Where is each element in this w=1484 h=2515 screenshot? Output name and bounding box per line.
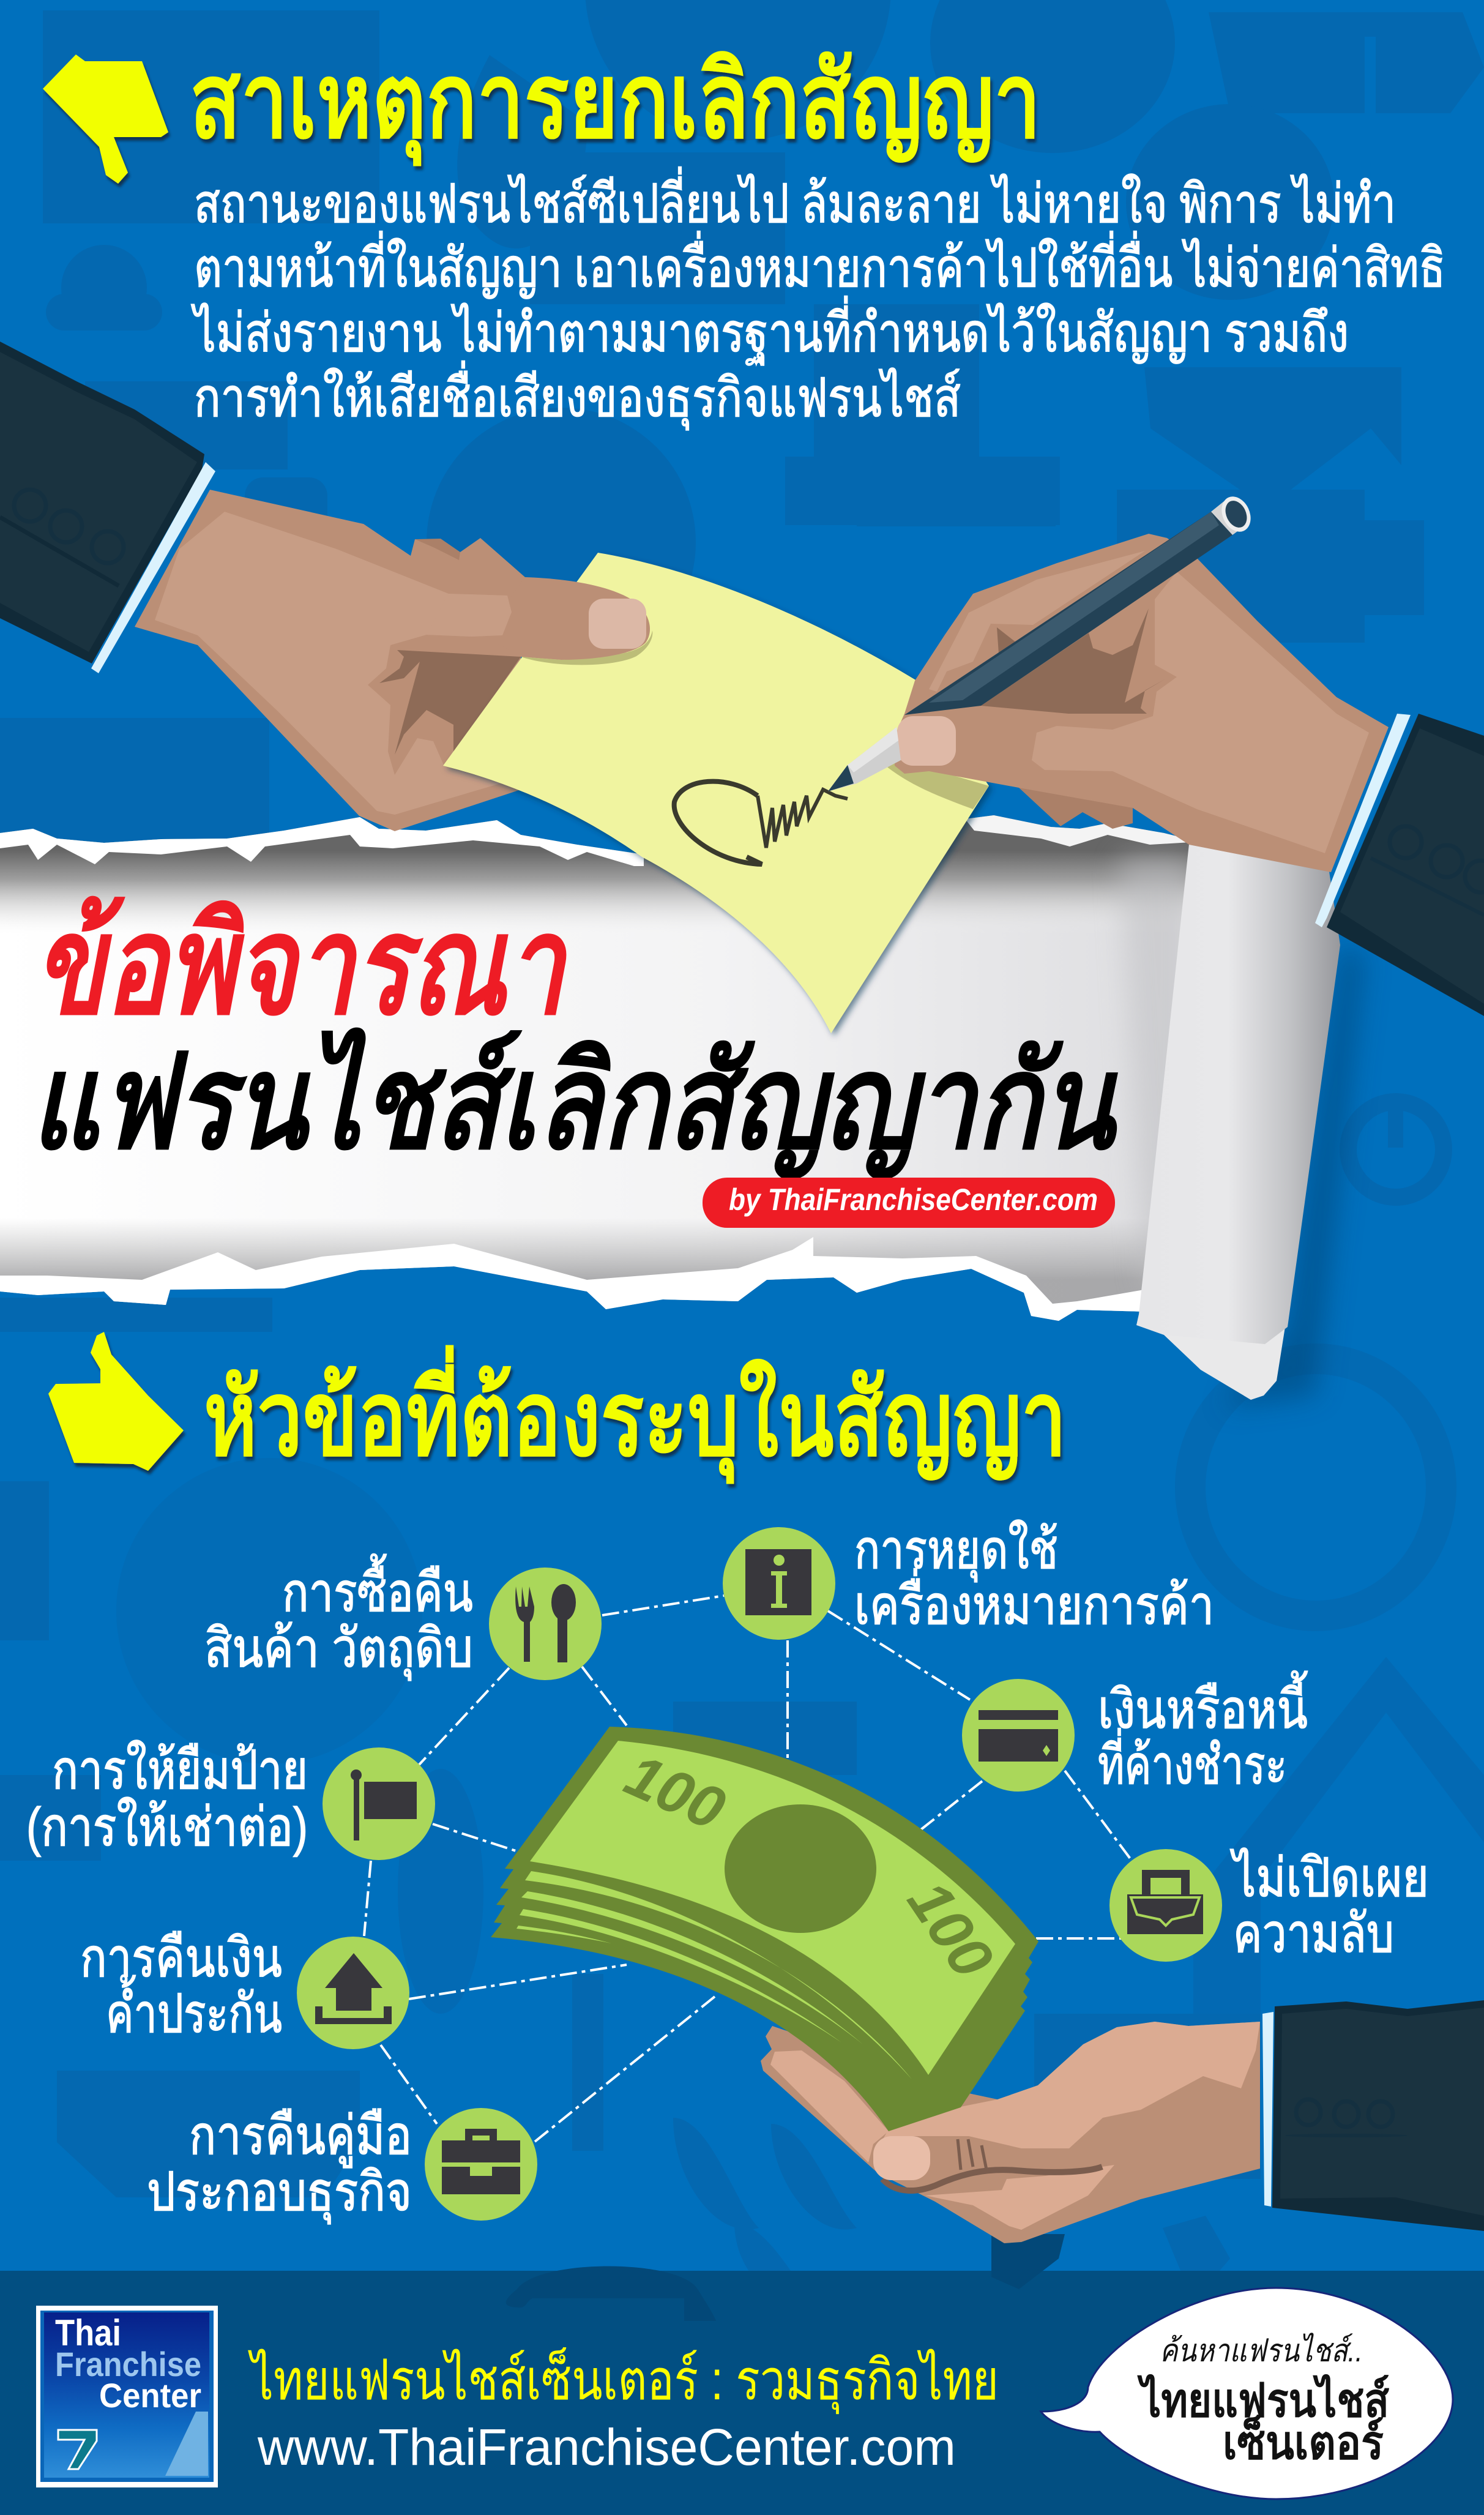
network lines xyxy=(364,1596,1131,2142)
logo xyxy=(36,2306,218,2487)
label: manual: ประกอบธุรกิจ xyxy=(147,2161,412,2224)
node: toolbox xyxy=(425,2108,537,2221)
left hand xyxy=(135,490,651,831)
label: secrets: ไม่เปิดเผย xyxy=(1230,1847,1429,1908)
heading: causes: สาเหตุการยกเลิกสัญญา xyxy=(190,42,1041,166)
torn top edge left xyxy=(0,817,644,866)
label: deposit xyxy=(80,1927,282,2044)
torn top edge right xyxy=(965,815,1191,846)
icon: info xyxy=(745,1549,811,1615)
icon: upload xyxy=(315,1953,392,2024)
label: food and materials xyxy=(204,1554,473,1681)
label: deposit: การคืนเงิน xyxy=(80,1927,282,1988)
icon: card xyxy=(979,1710,1058,1762)
paper sheet xyxy=(0,808,1199,1328)
right hand xyxy=(895,534,1389,872)
label: food and materials: สินค้า วัตถุดิบ xyxy=(204,1618,473,1681)
lower sleeve xyxy=(1262,2000,1484,2231)
label: debts: ที่ค้างชำระ xyxy=(1098,1728,1287,1795)
pen xyxy=(828,492,1256,791)
speech bubble xyxy=(1041,2288,1453,2499)
logo: Franchise xyxy=(55,2345,201,2383)
banknote stack: 100 xyxy=(895,1869,1007,1989)
torn bottom edge xyxy=(0,1237,1148,1321)
label: trademark: การหยุดใช้ xyxy=(854,1519,1058,1582)
heading: contract topics: หัวข้อที่ต้องระบุในสัญญา xyxy=(204,1345,1067,1484)
thumb nail xyxy=(897,716,956,766)
left thumb xyxy=(427,577,652,665)
byline pill: by ThaiFranchiseCenter.com xyxy=(729,1183,1098,1217)
label: debts: เงินหรือหนี้ xyxy=(1098,1671,1308,1740)
body text: causes xyxy=(191,166,1445,430)
left sleeve xyxy=(0,342,215,673)
node: upload xyxy=(297,1937,409,2049)
icon: toolbox xyxy=(442,2129,520,2194)
label: trademark xyxy=(854,1519,1214,1635)
buttons xyxy=(1390,826,1484,892)
lower hand xyxy=(761,2022,1260,2243)
paper roll xyxy=(1164,1327,1285,1400)
note stripes xyxy=(525,1871,912,2079)
label: signage: การให้ยืมป้าย xyxy=(52,1740,308,1800)
footer band xyxy=(0,2234,1484,2515)
label: trademark: เครื่องหมายการค้า xyxy=(854,1568,1214,1635)
label: secrets: ความลับ xyxy=(1233,1903,1394,1964)
label: debts xyxy=(1098,1671,1308,1795)
footer url: www.ThaiFranchiseCenter.com xyxy=(257,2418,956,2476)
main title: แฟรนไชส์เลิกสัญญากัน xyxy=(31,1027,1119,1180)
logo arrow xyxy=(58,2430,97,2469)
main title: ข้อพิจารณา xyxy=(34,888,569,1042)
speech bubble: ค้นหาแฟรนไชส์.. xyxy=(1160,2333,1363,2369)
node: card xyxy=(962,1679,1075,1792)
icon: thumbs down xyxy=(43,54,168,184)
label: manual: การคืนคู่มือ xyxy=(189,2105,412,2168)
node: flag xyxy=(323,1747,435,1860)
right sleeve xyxy=(1315,714,1484,1016)
label: secrets xyxy=(1230,1847,1429,1964)
label: food and materials: การซื้อคืน xyxy=(282,1554,473,1623)
logo: Center xyxy=(99,2376,201,2415)
contract paper with signature xyxy=(443,553,989,1033)
buttons xyxy=(14,490,124,563)
logo: Thai xyxy=(55,2312,121,2353)
icon: fork and spoon xyxy=(515,1584,576,1662)
denomination: 100 xyxy=(616,1741,735,1843)
icon: thumbs up xyxy=(48,1332,184,1471)
roll shadow xyxy=(1224,945,1365,1408)
speech bubble: เซ็นเตอร์ xyxy=(1223,2415,1384,2469)
banknote stack xyxy=(491,1727,1038,2131)
label: signage: (การให้เช่าต่อ) xyxy=(26,1796,308,1857)
speech bubble: ไทยแฟรนไชส์ xyxy=(1137,2374,1390,2427)
torn paper banner xyxy=(0,808,1365,1408)
label: deposit: ค้ำประกัน xyxy=(106,1975,282,2044)
byline pill xyxy=(703,1178,1115,1228)
main title xyxy=(31,888,1119,1180)
icon: flag xyxy=(351,1769,417,1840)
footer title: ไทยแฟรนไชส์เซ็นเตอร์ : รวมธุรกิจไทย xyxy=(247,2347,999,2415)
buttons xyxy=(1296,2099,1393,2127)
body text: causes: การทำให้เสียชื่อเสียงของธุรกิจแฟรนไชส์ xyxy=(194,361,961,430)
icon: bag xyxy=(1127,1870,1203,1934)
node: info xyxy=(723,1527,835,1640)
signature xyxy=(674,782,762,864)
label: signage xyxy=(26,1740,308,1857)
label: manual xyxy=(147,2105,412,2224)
node: secret briefcase xyxy=(1109,1849,1222,1962)
node: food and materials xyxy=(489,1568,602,1680)
